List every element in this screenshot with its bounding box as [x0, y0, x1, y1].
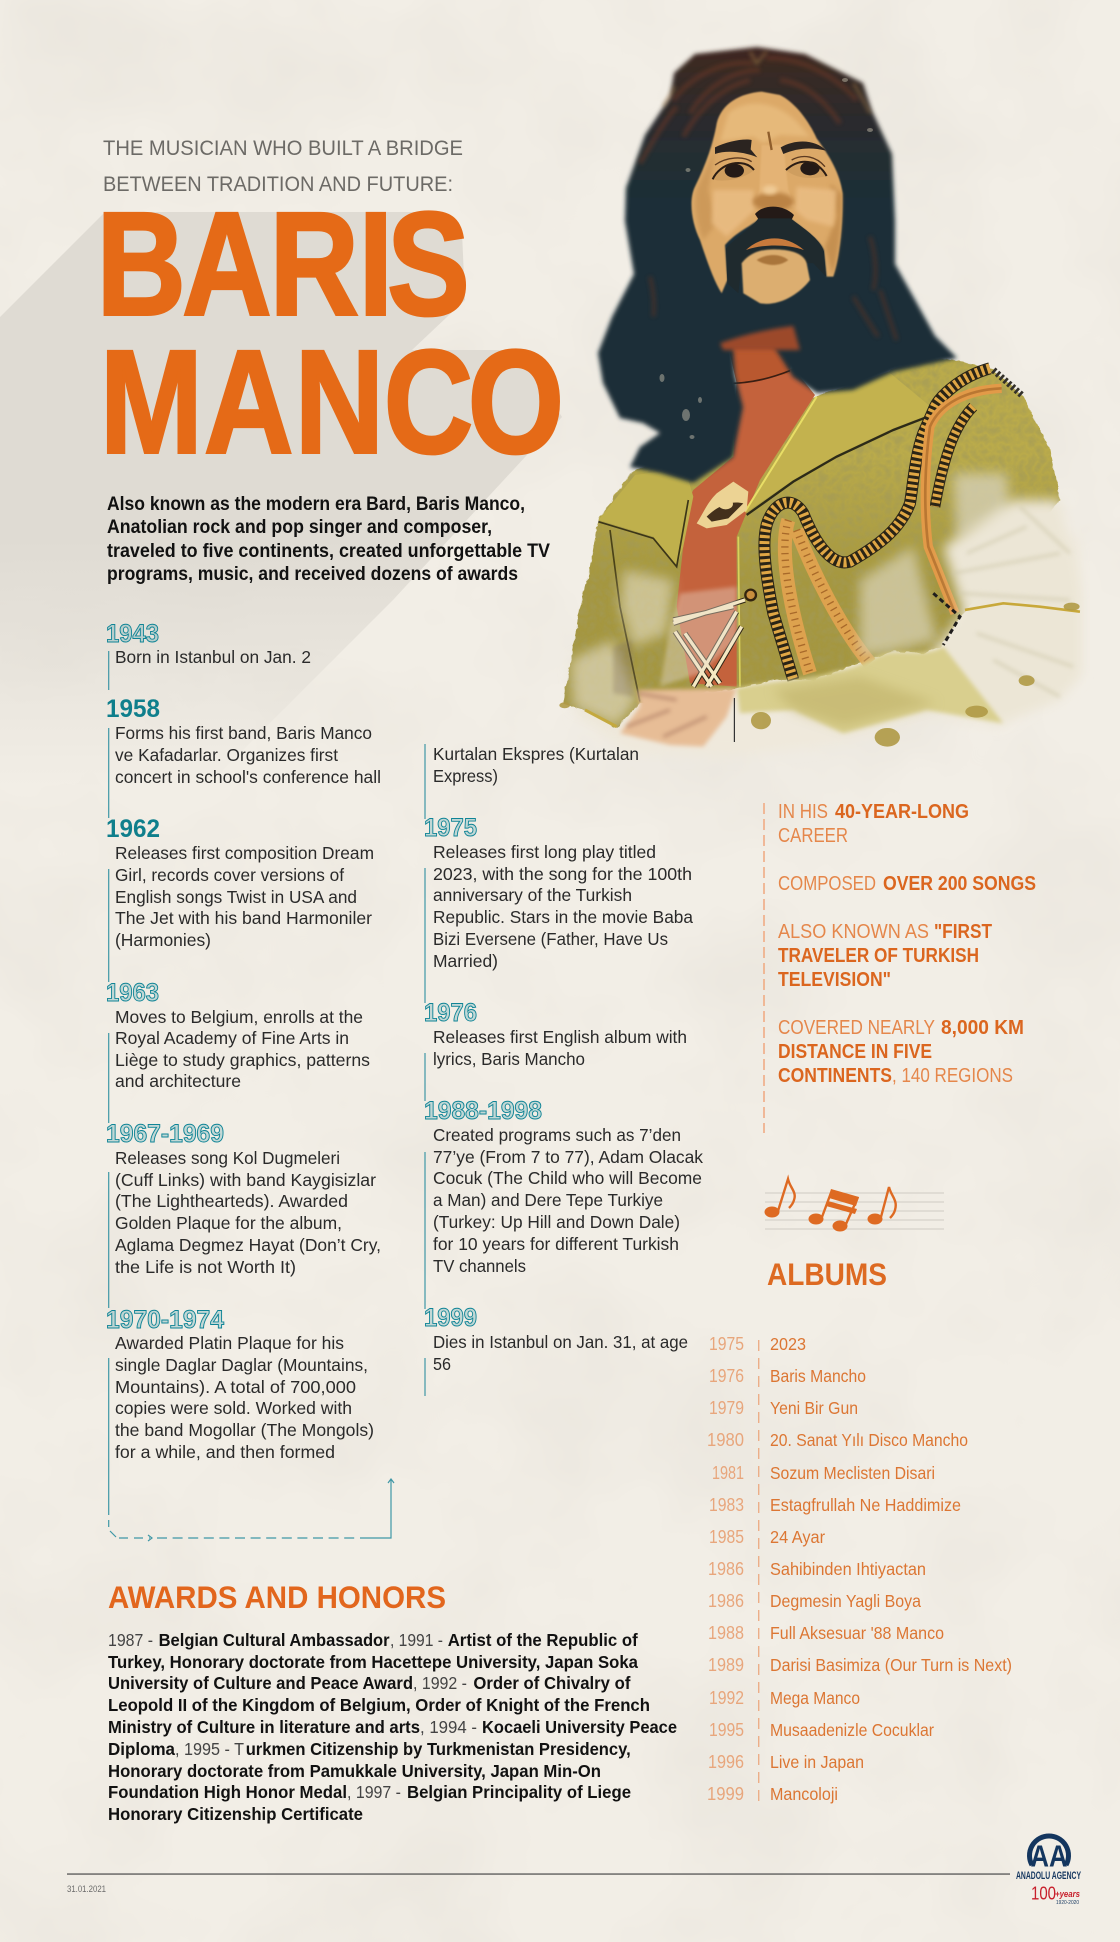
album 1986 second — [708, 1591, 921, 1611]
forehead light — [720, 104, 810, 143]
timeline entry: 1999 — [424, 1304, 688, 1374]
faded brush patches on jacket — [660, 587, 737, 687]
timeline entry: 1975: anniversary of the Turkish — [433, 885, 632, 905]
jacket and lower body — [559, 340, 1080, 780]
album 1989: Darisi Basimiza (Our Turn is Next) — [770, 1655, 1012, 1675]
timeline entry: 1967-1969 — [106, 1120, 381, 1277]
intro paragraph — [107, 494, 550, 585]
second rope — [935, 407, 973, 507]
timeline continuation: Kurtalan Ekspres: Express) — [433, 766, 498, 786]
album 1986 second: 1986 — [708, 1591, 744, 1611]
timeline entry: 1967-1969: (The Lighthearteds). Awarded — [115, 1191, 348, 1211]
album 1981: Sozum Meclisten Disari — [770, 1463, 935, 1483]
timeline entry: 1988-1998: Cocuk (The Child who will Become — [433, 1168, 702, 1188]
fact: distance: DISTANCE IN FIVE — [778, 1041, 932, 1063]
hair — [598, 47, 957, 483]
fact: distance: , 140 REGIONS — [892, 1065, 1013, 1087]
jacket weave texture — [564, 360, 1060, 728]
timeline entry: 1967-1969: Golden Plaque for the album, — [115, 1213, 342, 1233]
fact: distance: 8,000 KM — [941, 1017, 1024, 1039]
awards text: Belgian Cultural Ambassador — [159, 1630, 390, 1650]
awards text: , 1991 - — [390, 1630, 443, 1650]
album 1985 — [709, 1527, 825, 1547]
awards text: Order of Chivalry of — [473, 1673, 631, 1693]
album 1988: Full Aksesuar '88 Manco — [770, 1623, 944, 1643]
timeline entry: 1962: The Jet with his band Harmoniler — [115, 908, 372, 928]
heading: albums: ALBUMS — [767, 1256, 887, 1292]
timeline entry: 1962: English songs Twist in USA and — [115, 887, 357, 907]
timeline entry: 1963: Liège to study graphics, patterns — [115, 1050, 370, 1070]
eyes — [713, 163, 754, 181]
awards text: University of Culture and Peace Award — [108, 1673, 413, 1693]
fact: first traveler: TELEVISION" — [778, 969, 891, 991]
logo: Anadolu Agency: +years — [1055, 1889, 1080, 1899]
timeline entry: 1975: Republic. Stars in the movie Baba — [433, 907, 693, 927]
awards text: 1987 - — [108, 1630, 153, 1650]
timeline entry: 1988-1998 — [424, 1097, 703, 1276]
awards text: , 1992 - — [413, 1673, 467, 1693]
sleeve wash — [927, 500, 1080, 723]
album 1988: 1988 — [708, 1623, 744, 1643]
timeline entry: 1963: Royal Academy of Fine Arts in — [115, 1028, 349, 1048]
medallion — [697, 482, 748, 528]
album 1992: 1992 — [709, 1688, 744, 1708]
awards text: , 1997 - — [347, 1782, 401, 1802]
chest lacing — [673, 600, 745, 687]
title: Baris Manco: BARIS — [97, 181, 470, 346]
timeline entry: 1988-1998: (Turkey: Up Hill and Down Dale) — [433, 1212, 680, 1232]
awards text: , 1994 - — [420, 1717, 477, 1737]
timeline entry: 1976: Releases first English album with — [433, 1027, 687, 1047]
fact: career length: 40-YEAR-LONG — [835, 801, 969, 823]
album 1986: Sahibinden Ihtiyactan — [770, 1559, 926, 1579]
logo: Anadolu Agency: ANADOLU AGENCY — [1016, 1870, 1081, 1882]
album 1995 — [709, 1720, 934, 1740]
timeline entry: 1970-1974: the band Mogollar (The Mongols) — [115, 1420, 374, 1440]
shirt — [677, 368, 815, 687]
album 1979: Yeni Bir Gun — [770, 1398, 858, 1418]
head detail — [640, 52, 897, 350]
awards text: Leopold II of the Kingdom of Belgium, Order of Knight of the French — [108, 1695, 650, 1715]
album 1995: 1995 — [709, 1720, 744, 1740]
button loop — [745, 590, 756, 600]
timeline entry: 1962: (Harmonies) — [115, 930, 211, 950]
hair grain specks — [660, 78, 873, 439]
portrait illustration — [559, 47, 1080, 780]
brush streaks — [953, 507, 1073, 697]
cuff — [585, 710, 617, 727]
logo: Anadolu Agency: 100 — [1031, 1884, 1056, 1904]
awards text: Turkey, Honorary doctorate from Hacettepe University, Japan Soka — [108, 1652, 638, 1672]
fact: career length: IN HIS — [778, 801, 828, 823]
timeline entry: 1988-1998: a Man) and Dere Tepe Turkiye — [433, 1190, 663, 1210]
timeline continuation: Kurtalan Ekspres: Kurtalan Ekspres (Kurtalan — [433, 744, 639, 764]
right collar — [745, 372, 937, 513]
album 1981: 1981 — [712, 1463, 744, 1483]
intro paragraph: Also known as the modern era Bard, Baris Manco, — [107, 494, 525, 515]
album 1976: 1976 — [709, 1366, 744, 1386]
intro paragraph: Anatolian rock and pop singer and composer, — [107, 517, 492, 538]
timeline rail and arrow — [109, 651, 425, 1541]
fact: career length — [778, 801, 969, 847]
intro paragraph: traveled to five continents, created unforgettable TV — [107, 541, 550, 562]
timeline entry: 1963 — [106, 979, 370, 1091]
timeline entry: 1976 — [424, 999, 687, 1069]
album 1999 — [707, 1784, 838, 1804]
album 1989: 1989 — [708, 1655, 744, 1675]
chin — [742, 249, 810, 304]
timeline entry: 1963: 1963 — [106, 979, 159, 1007]
awards text: Honorary Citizenship Certificate — [108, 1804, 363, 1824]
timeline entry: 1999: Dies in Istanbul on Jan. 31, at age — [433, 1332, 688, 1352]
awards text: Foundation High Honor Medal — [108, 1782, 347, 1802]
timeline entry: 1975 — [424, 814, 693, 971]
awards text: Ministry of Culture in literature and arts — [108, 1717, 420, 1737]
album 1975: 1975 — [709, 1334, 744, 1354]
logo: Anadolu Agency: AA — [1030, 1839, 1068, 1874]
timeline entry: 1962: Releases first composition Dream — [115, 843, 374, 863]
album 1975: 2023 — [770, 1334, 806, 1354]
timeline entry: 1967-1969: 1967-1969 — [106, 1120, 224, 1148]
album 1996 — [708, 1752, 864, 1772]
subtitle: THE MUSICIAN WHO BUILT A BRIDGE — [103, 136, 463, 160]
orange cord — [925, 388, 1002, 613]
nose — [753, 145, 795, 207]
awards text: urkmen Citizenship by Turkmenistan Presidency, — [246, 1739, 631, 1759]
timeline entry: 1970-1974 — [106, 1306, 374, 1462]
timeline entry: 1988-1998: for 10 years for different Turkish — [433, 1234, 679, 1254]
fact: songs — [778, 873, 1036, 895]
brown hair strands — [640, 58, 857, 163]
timeline entry: 1958 — [106, 695, 381, 787]
timeline entry: 1975: Releases first long play titled — [433, 842, 656, 862]
awards text: Honorary doctorate from Pamukkale University, Japan Min-On — [108, 1761, 601, 1781]
timeline entry: 1988-1998: Created programs such as 7’den — [433, 1125, 681, 1145]
logo: Anadolu Agency — [1016, 1836, 1081, 1906]
braids — [785, 520, 870, 673]
footer rule — [67, 1873, 1010, 1875]
timeline entry: 1943: Born in Istanbul on Jan. 2 — [115, 647, 311, 667]
album 1992: Mega Manco — [770, 1688, 860, 1708]
album 1986: 1986 — [708, 1559, 744, 1579]
scratch marks — [933, 593, 960, 645]
timeline entry: 1962: 1962 — [106, 815, 160, 843]
album 1983: Estagfrullah Ne Haddimize — [770, 1495, 961, 1515]
album 1986 — [708, 1559, 926, 1579]
timeline entry: 1970-1974: for a while, and then formed — [115, 1442, 335, 1462]
timeline entry: 1967-1969: (Cuff Links) with band Kaygisizlar — [115, 1170, 376, 1190]
left collar — [598, 472, 693, 567]
fact: first traveler: "FIRST — [934, 921, 992, 943]
album 1980 — [707, 1430, 968, 1450]
timeline entry: 1970-1974: 1970-1974 — [106, 1306, 224, 1334]
turtleneck — [727, 340, 793, 383]
album 1981 — [712, 1463, 935, 1483]
album 1996: 1996 — [708, 1752, 744, 1772]
fact: first traveler — [778, 921, 992, 991]
timeline entry: 1988-1998: TV channels — [433, 1256, 526, 1276]
fact: career length: CAREER — [778, 825, 848, 847]
face — [691, 92, 843, 293]
timeline entry: 1970-1974: single Daglar Daglar (Mountains, — [115, 1355, 368, 1375]
date: 31.01.2021 — [67, 1884, 106, 1895]
album 1986 second: Degmesin Yagli Boya — [770, 1591, 921, 1611]
timeline entry: 1975: 1975 — [424, 814, 477, 842]
moustache — [726, 218, 826, 293]
intro paragraph: programs, music, and received dozens of awards — [107, 564, 518, 585]
timeline entry: 1943: 1943 — [106, 620, 159, 648]
temple and cheek shading — [695, 150, 717, 240]
album 1979: 1979 — [709, 1398, 744, 1418]
subtitle — [103, 136, 463, 196]
album 1996: Live in Japan — [770, 1752, 864, 1772]
icon: music notes on staff — [764, 1179, 944, 1232]
timeline entry: 1975: 2023, with the song for the 100th — [433, 864, 692, 884]
timeline entry: 1963: Moves to Belgium, enrolls at the — [115, 1007, 363, 1027]
timeline entry: 1975: Married) — [433, 951, 498, 971]
timeline entry: 1943 — [106, 620, 311, 667]
timeline entry: 1999: 1999 — [424, 1304, 477, 1332]
album 1980: 20. Sanat Yılı Disco Mancho — [770, 1430, 968, 1450]
album 1976 — [709, 1366, 866, 1386]
timeline entry: 1975: Bizi Eversene (Father, Have Us — [433, 929, 668, 949]
lower wash — [737, 647, 1003, 733]
neck collar band — [720, 326, 800, 350]
timeline entry: 1958: concert in school's conference hall — [115, 767, 381, 787]
heading: awards and honors: AWARDS AND HONORS — [108, 1579, 446, 1615]
album 1992 — [709, 1688, 860, 1708]
awards text — [108, 1630, 677, 1824]
upper lip — [746, 238, 804, 250]
subtitle: BETWEEN TRADITION AND FUTURE: — [103, 172, 453, 196]
fact: songs: OVER 200 SONGS — [883, 873, 1036, 895]
timeline entry: 1999: 56 — [433, 1354, 451, 1374]
title long shadow — [0, 212, 562, 790]
placket line — [738, 537, 740, 687]
eyebrows — [715, 140, 757, 157]
timeline entry: 1976: 1976 — [424, 999, 477, 1027]
album 1985: 24 Ayar — [770, 1527, 825, 1547]
awards text: Belgian Principality of Liege — [407, 1782, 631, 1802]
album 1999: 1999 — [707, 1784, 744, 1804]
albums list — [707, 1334, 1012, 1804]
fact: first traveler: TRAVELER OF TURKISH — [778, 945, 979, 967]
title: Baris Manco — [97, 181, 564, 484]
career facts panel — [764, 801, 1036, 1133]
album 1983: 1983 — [709, 1495, 744, 1515]
timeline entry: 1958: 1958 — [106, 695, 160, 723]
timeline entry: 1970-1974: copies were sold. Worked with — [115, 1398, 352, 1418]
album 1999: Mancoloji — [770, 1784, 838, 1804]
timeline entry: 1976: lyrics, Baris Mancho — [433, 1049, 585, 1069]
album 1995: Musaadenizle Cocuklar — [770, 1720, 934, 1740]
album 1980: 1980 — [707, 1430, 744, 1450]
timeline continuation: Kurtalan Ekspres — [433, 744, 639, 786]
awards text: Kocaeli University Peace — [482, 1717, 677, 1737]
timeline entry: 1988-1998: 77’ye (From 7 to 77), Adam Olacak — [433, 1147, 703, 1167]
top rope — [993, 370, 1022, 395]
photo-crossing rule — [734, 698, 735, 742]
logo: Anadolu Agency: 1920-2020 — [1056, 1900, 1079, 1906]
jacket base — [563, 357, 1060, 728]
timeline entry: 1958: ve Kafadarlar. Organizes first — [115, 745, 338, 765]
timeline entry: 1970-1974: Mountains). A total of 700,000 — [115, 1377, 356, 1397]
timeline entry: 1988-1998: 1988-1998 — [424, 1097, 542, 1125]
album 1979 — [709, 1398, 858, 1418]
fact: songs: COMPOSED — [778, 873, 876, 895]
album 1976: Baris Mancho — [770, 1366, 866, 1386]
timeline entry: 1962 — [106, 815, 374, 950]
fact: distance: CONTINENTS — [778, 1065, 892, 1087]
awards text: Artist of the Republic of — [448, 1630, 638, 1650]
album 1985: 1985 — [709, 1527, 744, 1547]
timeline entry: 1967-1969: Releases song Kol Dugmeleri — [115, 1148, 340, 1168]
timeline entry: 1963: and architecture — [115, 1071, 241, 1091]
timeline entry: 1962: Girl, records cover versions of — [115, 865, 344, 885]
ochre flecks — [559, 603, 1080, 747]
album 1988 — [708, 1623, 944, 1643]
fact: first traveler: ALSO KNOWN AS — [778, 921, 929, 943]
hands — [620, 688, 737, 747]
album 1975 — [709, 1334, 806, 1354]
awards text: Diploma — [108, 1739, 175, 1759]
shoulder rope — [764, 368, 990, 680]
timeline entry: 1967-1969: Aglama Degmez Hayat (Don’t Cry, — [115, 1235, 381, 1255]
timeline entry: 1967-1969: the Life is not Worth It) — [115, 1257, 296, 1277]
title: Baris Manco: MANCO — [100, 319, 564, 484]
timeline entry: 1958: Forms his first band, Baris Manco — [115, 723, 372, 743]
awards text: , 1995 - T — [175, 1739, 244, 1759]
timeline entry: 1970-1974: Awarded Platin Plaque for his — [115, 1333, 344, 1353]
pale brush wash — [573, 507, 1080, 757]
fact: distance: COVERED NEARLY — [778, 1017, 935, 1039]
left sleeve fold — [610, 530, 640, 702]
fact: distance — [778, 1017, 1024, 1087]
